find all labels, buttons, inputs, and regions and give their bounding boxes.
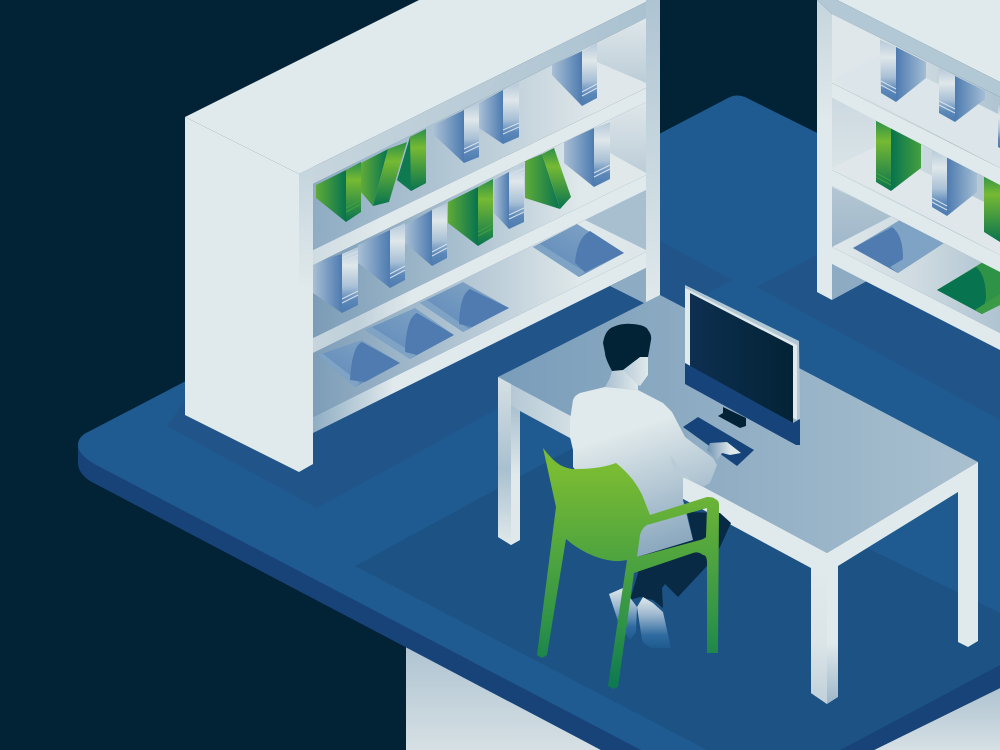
floor rug under desk <box>355 425 1000 750</box>
front shoe <box>637 597 671 648</box>
coat <box>570 387 717 557</box>
platform side edge <box>78 445 1000 750</box>
left shelf right post <box>646 0 660 304</box>
monitor back edge <box>685 285 800 420</box>
left shelf side panel <box>185 117 299 472</box>
back shoe <box>609 588 637 640</box>
monitor stand <box>718 407 746 428</box>
desk left leg and front band <box>498 377 827 704</box>
right shelf back rows <box>832 14 1000 333</box>
floor rug under left shelf <box>167 100 732 508</box>
monitor chin <box>685 363 800 445</box>
left shelf flat binders row 3 <box>318 224 624 387</box>
legs <box>630 512 731 608</box>
right shelf post <box>817 0 832 300</box>
collar <box>605 370 638 390</box>
hair <box>603 324 651 371</box>
left shelf frame beam <box>299 0 660 190</box>
neck <box>612 357 648 386</box>
left shelf binders row 1 <box>316 43 597 222</box>
right shelf top face <box>837 0 1000 82</box>
right bookshelf <box>817 0 1000 350</box>
desk front leg <box>811 553 838 704</box>
monitor screen <box>690 293 793 423</box>
left shelf binders row 2 <box>313 122 610 313</box>
desk <box>498 295 978 704</box>
sleeve shadow <box>670 455 690 480</box>
keyboard <box>683 417 754 466</box>
desk top surface <box>498 295 978 553</box>
support column left <box>406 645 601 750</box>
right shelf flat binders <box>853 220 1000 314</box>
floor rug under right shelf <box>757 200 1000 420</box>
green chair <box>537 448 719 689</box>
support column right <box>874 688 1000 750</box>
hand <box>707 442 741 460</box>
left shelf back rows <box>313 18 646 417</box>
left shelf top face <box>185 0 650 174</box>
left shelf front post <box>299 167 313 472</box>
right shelf frame beam <box>817 0 1000 97</box>
monitor white frame <box>685 288 797 420</box>
left shelf boards <box>313 88 646 433</box>
computer monitor <box>685 285 800 445</box>
left bookshelf <box>185 0 660 472</box>
seated man <box>570 324 741 648</box>
right shelf binders <box>876 40 1000 242</box>
desk right band and leg <box>827 462 978 647</box>
right shelf boards <box>832 83 1000 350</box>
